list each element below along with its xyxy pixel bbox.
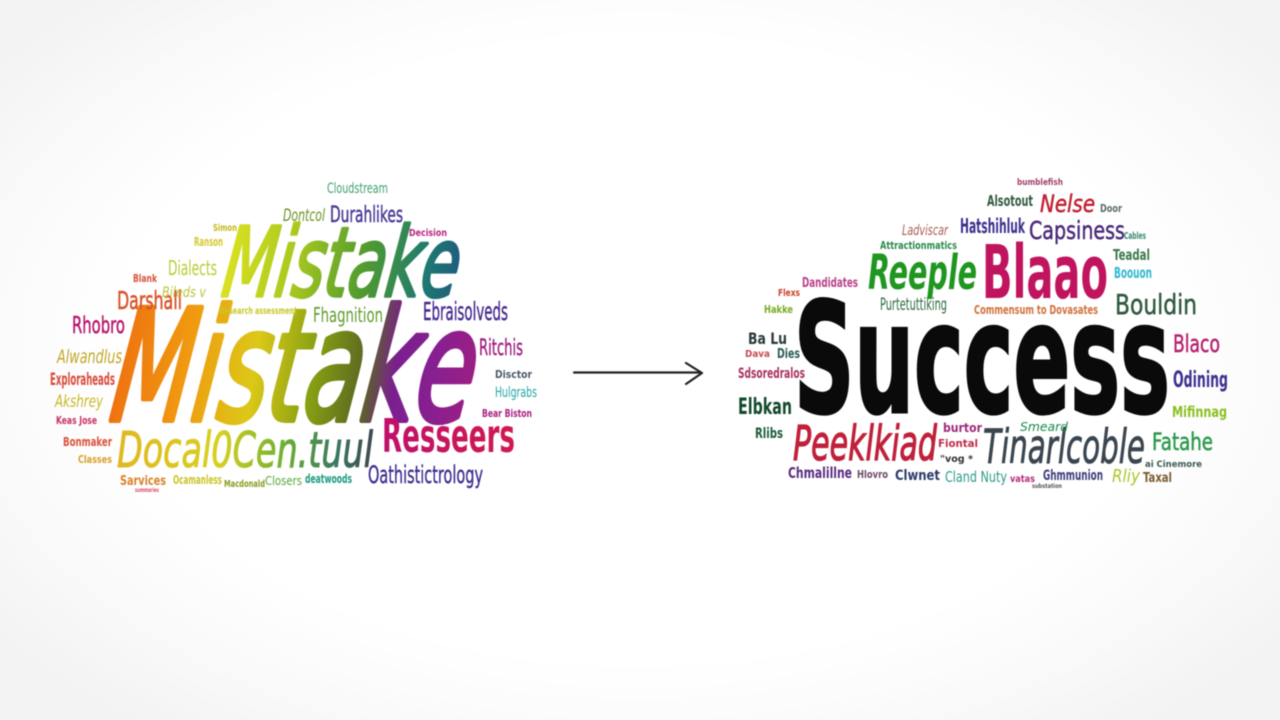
small words: success cloud: Cland Nuty xyxy=(945,468,1007,486)
small words: mistake cloud: Simon xyxy=(213,223,237,234)
small words: mistake cloud: Alwandlus xyxy=(56,346,122,368)
small words: mistake cloud: deatwoods xyxy=(305,472,352,486)
small words: mistake cloud: Classes xyxy=(78,453,112,466)
small words: mistake cloud: Oathistictrology xyxy=(368,461,483,489)
word: Docal0Cen.tuul: Docal0Cen.tuul xyxy=(117,422,373,479)
small words: mistake cloud: Bileds v xyxy=(162,285,207,301)
small words: success cloud: Blaco xyxy=(1173,330,1220,358)
small words: mistake cloud: Akshrey xyxy=(54,392,104,412)
small words: success cloud: Nelse xyxy=(1040,190,1095,218)
small words: success cloud: Fiontal xyxy=(938,437,978,450)
arrow: mistake to success xyxy=(574,363,702,384)
small words: success cloud: Hlovro xyxy=(857,468,888,481)
small words: success cloud: "vog * xyxy=(940,454,974,465)
small words: mistake cloud: Sarvices xyxy=(120,474,166,489)
small words: success cloud: Smeard xyxy=(1020,420,1068,434)
small words: success cloud: Mifinnag xyxy=(1172,403,1227,421)
small words: success cloud: Odining xyxy=(1173,368,1228,393)
small words: success cloud: Fatahe xyxy=(1152,428,1213,456)
small words: mistake cloud: Bonmaker xyxy=(63,435,112,449)
small words: success cloud: Bouldin xyxy=(1115,288,1197,321)
small words: mistake cloud: summaries xyxy=(135,487,159,494)
small words: mistake cloud: Dontcol xyxy=(283,206,325,226)
small words: mistake cloud: Research assessment xyxy=(220,306,297,317)
small words: success cloud: Alsotout xyxy=(987,192,1033,210)
small words: mistake cloud: Ranson xyxy=(194,235,223,249)
small words: mistake cloud: Exploraheads xyxy=(50,370,115,390)
small words: success cloud: Attractionmatics xyxy=(880,239,957,252)
small words: success cloud: Ladviscar xyxy=(902,223,949,239)
small words: success cloud: Sdsoredralos xyxy=(738,366,805,382)
word: Tinarlcoble: Tinarlcoble xyxy=(983,420,1145,475)
small words: success cloud: Boouon xyxy=(1114,264,1152,282)
small words: mistake cloud xyxy=(50,181,537,494)
small words: mistake cloud: Durahlikes xyxy=(330,203,403,228)
small words: success cloud: Ba Lu xyxy=(748,329,787,348)
small words: success cloud: Clwnet xyxy=(895,468,940,484)
small words: success cloud: Taxal xyxy=(1143,471,1172,486)
word: Peeklkiad: Peeklkiad xyxy=(793,416,937,472)
small words: mistake cloud: Ocamanless xyxy=(173,473,222,487)
word: large Mistake: Mistake xyxy=(103,278,490,457)
small words: success cloud: Hakke xyxy=(764,303,793,316)
small words: success cloud: Commensum to Dovasates xyxy=(974,303,1098,317)
small words: success cloud: Chmalillne xyxy=(788,464,852,482)
small words: success cloud: Elbkan xyxy=(738,395,792,420)
small words: success cloud: Cables xyxy=(1124,231,1146,242)
small words: mistake cloud: Macdonald xyxy=(224,479,265,490)
small words: success cloud: Dandidates xyxy=(802,276,858,291)
word: Blaao: Blaao xyxy=(982,230,1108,316)
small words: success cloud: Hatshihluk xyxy=(960,214,1025,238)
small words: success cloud: Capsiness xyxy=(1029,216,1125,245)
small words: mistake cloud: Dialects xyxy=(168,256,217,280)
small words: mistake cloud: Closers xyxy=(265,474,302,488)
small words: mistake cloud: Ebraisolveds xyxy=(423,297,508,326)
small words: mistake cloud: Bear Biston xyxy=(482,407,532,420)
small words: mistake cloud: Cloudstream xyxy=(327,181,388,197)
panel: success word cloud xyxy=(738,178,1228,490)
small words: mistake cloud: Ritchis xyxy=(479,336,523,361)
word: Reeple: Reeple xyxy=(868,245,977,301)
small words: success cloud: Flexs xyxy=(778,288,800,299)
word: Resseers: Resseers xyxy=(382,409,515,463)
small words: mistake cloud: Hulgrabs xyxy=(495,385,537,401)
small words: success cloud: ai Cinemore xyxy=(1145,460,1202,470)
small words: mistake cloud: Fhagnition xyxy=(313,303,383,327)
small words: mistake cloud: Disctor xyxy=(495,368,532,381)
small words: success cloud xyxy=(738,178,1228,490)
small words: success cloud: Door xyxy=(1100,202,1122,215)
small words: success cloud: vatas xyxy=(1010,474,1035,485)
small words: success cloud: Rlibs xyxy=(755,426,783,442)
small words: success cloud: Dies xyxy=(777,347,800,362)
small words: mistake cloud: Blank xyxy=(133,272,157,285)
small words: success cloud: Rliy xyxy=(1112,466,1140,487)
small words: success cloud: bumblefish xyxy=(1017,178,1063,188)
word: second Mistake: Mistake xyxy=(217,206,469,319)
small words: success cloud: Teadal xyxy=(1113,246,1150,264)
small words: success cloud: substation xyxy=(1032,483,1062,490)
small words: mistake cloud: Keas Jose xyxy=(56,414,97,427)
small words: mistake cloud: Decision xyxy=(409,228,447,239)
small words: mistake cloud: Rhobro xyxy=(72,313,125,339)
small words: mistake cloud: Darshall xyxy=(117,286,182,315)
small words: success cloud: burtor xyxy=(943,421,982,435)
small words: success cloud: Dava xyxy=(745,349,770,360)
small words: success cloud: Ghmmunion xyxy=(1043,468,1103,484)
small words: success cloud: Purtetuttiking xyxy=(880,295,947,315)
panel: mistake word cloud xyxy=(50,181,537,494)
